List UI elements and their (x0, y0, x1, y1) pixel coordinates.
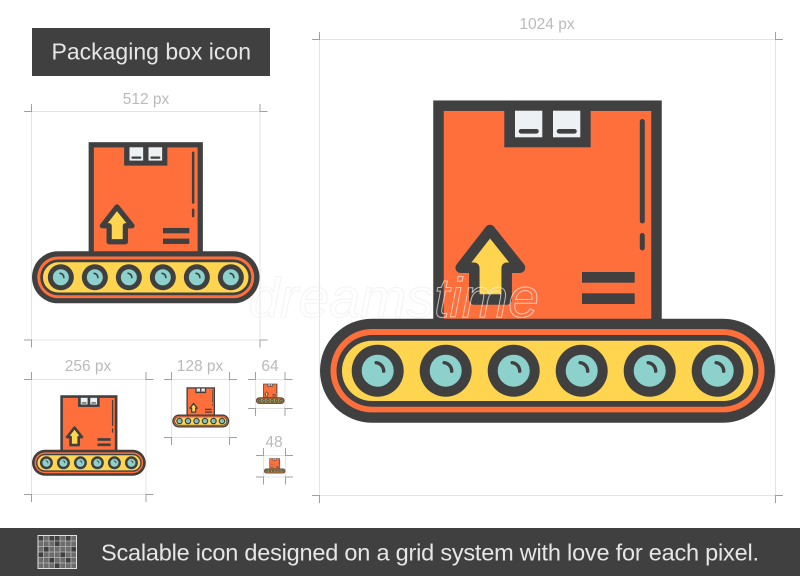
label: 512 px: 512 px (123, 91, 170, 108)
tagline: Scalable icon designed on a grid system with love for each pixel. (101, 540, 759, 566)
frame: 512 px (24, 104, 268, 348)
title box (32, 28, 270, 76)
icon: large conveyor with box (320, 105, 775, 423)
footer bar (0, 528, 800, 576)
label: 128 px: 128 px (177, 358, 224, 375)
label: 1024 px: 1024 px (519, 16, 575, 33)
icon: 128 px conveyor with box (172, 388, 229, 428)
frame: 1024 px (312, 32, 783, 503)
icon: 64 px conveyor with box (256, 384, 284, 404)
icon: pixel grid (38, 536, 76, 568)
title box: Packaging box icon (52, 38, 251, 64)
label: 256 px: 256 px (65, 358, 112, 375)
icon: 256 px conveyor with box (32, 396, 146, 476)
icon: 48 px conveyor with box (264, 459, 285, 474)
icon: 512 px conveyor with box (32, 144, 260, 303)
watermark: dreamstime (249, 266, 539, 329)
label: 64: 64 (261, 358, 279, 375)
frame: 64 px (248, 372, 292, 416)
frame: 128 px (164, 372, 237, 445)
frame: 48 px (256, 448, 293, 484)
label: 48: 48 (265, 434, 283, 451)
frame: 256 px (24, 372, 154, 502)
